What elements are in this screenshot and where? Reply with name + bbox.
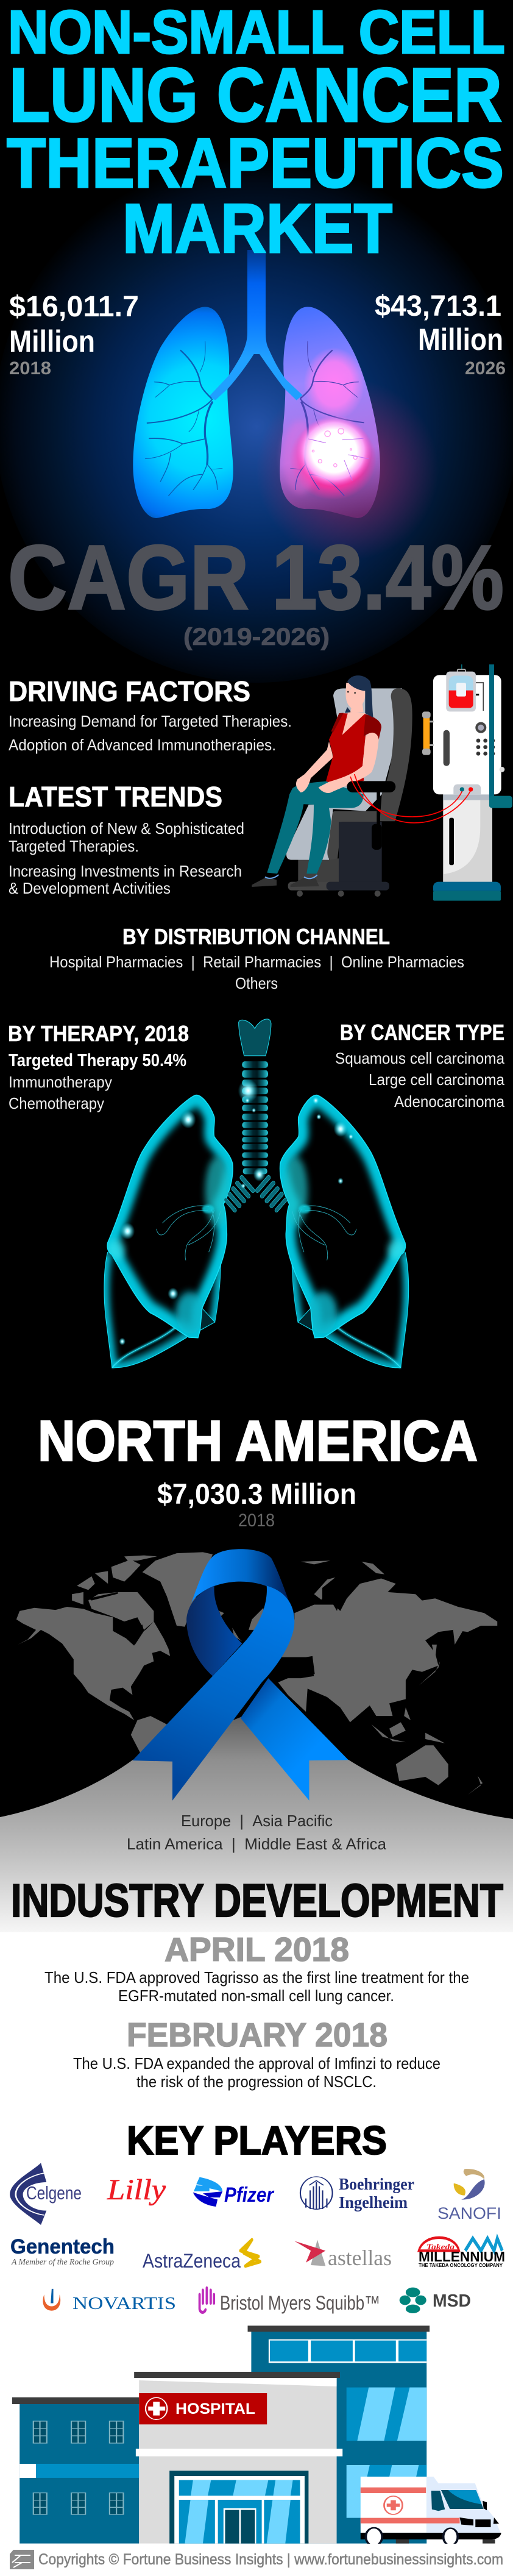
heading: North America: NORTH AMERICA <box>38 1409 478 1473</box>
illustration: patient in chair beside dialysis machine <box>252 664 512 901</box>
logo: Celgene <box>10 2163 82 2225</box>
latest trends list: Introduction of New & Sophisticated <box>9 819 244 838</box>
development: February 2018: The U.S. FDA expanded the approval of Imfinzi to reduce <box>73 2054 440 2073</box>
red hospital sign <box>139 2393 267 2424</box>
title: MARKET <box>122 190 392 268</box>
bronchi rings <box>224 1175 288 1213</box>
hospital sign label: HOSPITAL <box>175 2400 255 2418</box>
logo: Bristol Myers Squibb <box>200 2288 380 2314</box>
segment: by cancer type: Adenocarcinoma <box>394 1092 504 1111</box>
radial glow behind lungs <box>0 158 513 683</box>
blood lines <box>350 774 471 823</box>
left lung airways <box>145 341 222 496</box>
stat: 2026 market value: $43,713.1 <box>375 290 501 322</box>
logo: Astellas: astellas <box>328 2246 392 2270</box>
left lung <box>133 307 233 518</box>
heading: driving factors: DRIVING FACTORS <box>9 675 250 707</box>
tall rear block <box>248 2325 430 2544</box>
logo: MSD: MSD <box>433 2291 471 2311</box>
logo: Pfizer <box>193 2177 275 2207</box>
entrance <box>169 2471 308 2544</box>
segment: by therapy <box>8 1021 189 1112</box>
logo: Boehringer Ingelheim: Boehringer <box>339 2175 414 2193</box>
logo: Genentech: Genentech <box>10 2235 115 2258</box>
other regions <box>127 1812 387 1853</box>
logo: Sanofi <box>437 2169 501 2222</box>
stat: 2026 market value <box>375 290 506 379</box>
stat: 2026 market value: 2026 <box>465 358 506 379</box>
development: February 2018 <box>73 2016 440 2091</box>
segment: by therapy: Targeted Therapy 50.4% <box>9 1051 186 1070</box>
tracheal rings <box>242 1061 268 1174</box>
development: April 2018: APRIL 2018 <box>165 1930 349 1968</box>
segment: by therapy: Immunotherapy <box>9 1073 112 1091</box>
heading: key players: KEY PLAYERS <box>127 2118 387 2163</box>
right lung <box>280 307 380 518</box>
trachea and main bronchi <box>209 250 303 400</box>
logo: Lilly: Lilly <box>107 2174 166 2206</box>
logo: Novartis: NOVARTIS <box>73 2294 176 2313</box>
right lung airways <box>291 341 364 496</box>
logo: Pfizer: Pfizer <box>224 2183 275 2207</box>
development: April 2018 <box>44 1930 469 2005</box>
title <box>7 0 505 268</box>
logo: Sanofi: SANOFI <box>437 2204 501 2222</box>
segment: by distribution channel: Hospital Pharmacies | Retail Pharmacies | Online Pharmacies <box>49 953 464 971</box>
segment: by distribution channel: BY DISTRIBUTION CHANNEL <box>122 924 390 949</box>
stat: 2018 market value: $16,011.7 <box>9 291 139 323</box>
right x-ray lung <box>280 1095 409 1368</box>
footer logo icon <box>10 2550 34 2569</box>
segment: by cancer type <box>335 1020 505 1111</box>
logo: Takeda Millennium: MILLENNIUM <box>419 2249 505 2265</box>
pink glow beside lung <box>256 378 439 561</box>
logo: Genentech: A Member of the Roche Group <box>11 2258 114 2267</box>
driving factors list: Adoption of Advanced Immunotherapies. <box>9 736 276 754</box>
regional year: 2018 <box>238 1510 275 1531</box>
stat: 2018 market value: 2018 <box>9 358 51 379</box>
driving factors list <box>9 712 292 754</box>
other regions: Europe | Asia Pacific <box>181 1812 333 1830</box>
tumour glow <box>297 416 372 486</box>
illustration: x-ray lungs <box>104 1019 409 1368</box>
segment: by cancer type: Squamous cell carcinoma <box>335 1049 504 1067</box>
left x-ray lung <box>104 1095 233 1368</box>
dialysis machine <box>422 664 512 901</box>
awareness ribbon <box>132 1549 348 1801</box>
development: February 2018: FEBRUARY 2018 <box>127 2016 387 2054</box>
logo: Novartis <box>43 2289 176 2313</box>
illustration: hospital building <box>12 2325 501 2546</box>
dark upper panel <box>0 0 513 1932</box>
logo: Takeda Millennium: THE TAKEDA ONCOLOGY COMPANY <box>419 2263 503 2268</box>
woman seated <box>252 675 395 887</box>
latest trends list <box>9 819 244 897</box>
heading: latest trends: LATEST TRENDS <box>9 781 222 813</box>
central block <box>134 2372 342 2544</box>
segment: by therapy: Chemotherapy <box>9 1094 104 1112</box>
other regions: Latin America | Middle East & Africa <box>127 1835 387 1853</box>
logo: Celgene: Celgene <box>26 2182 82 2204</box>
logo: Takeda Millennium: Takeda <box>426 2242 455 2251</box>
latest trends list: & Development Activities <box>9 879 171 897</box>
logo: Boehringer Ingelheim <box>300 2175 414 2211</box>
larynx <box>239 1019 271 1056</box>
CAGR period: (2019-2026) <box>183 624 330 650</box>
development: April 2018: The U.S. FDA approved Tagrisso as the first line treatment for the <box>44 1968 469 1987</box>
stat: 2026 market value: Million <box>418 322 503 357</box>
regional value: $7,030.3 Million <box>157 1478 356 1510</box>
world map <box>16 1552 497 1795</box>
segment: by distribution channel <box>49 924 464 992</box>
logo: MSD <box>400 2288 471 2313</box>
left wing <box>12 2397 141 2544</box>
segment: by distribution channel: Others <box>235 974 278 992</box>
segment: by therapy: BY THERAPY, 2018 <box>8 1021 189 1046</box>
development: February 2018: the risk of the progression of NSCLC. <box>136 2073 377 2091</box>
ambulance <box>361 2477 501 2546</box>
glowing spots <box>119 1079 353 1345</box>
logo: Boehringer Ingelheim: Ingelheim <box>339 2193 408 2211</box>
segment: by cancer type: Large cell carcinoma <box>369 1070 505 1089</box>
development: April 2018: EGFR-mutated non-small cell lung cancer. <box>118 1987 394 2005</box>
logo: Astellas <box>294 2240 392 2270</box>
logo: AstraZeneca <box>143 2240 260 2272</box>
driving factors list: Increasing Demand for Targeted Therapies. <box>9 712 292 730</box>
logo: Bristol Myers Squibb: Bristol Myers Squibb™ <box>220 2292 380 2314</box>
latest trends list: Increasing Investments in Research <box>9 862 242 880</box>
logo: Takeda Millennium <box>419 2238 505 2268</box>
latest trends list: Targeted Therapies. <box>9 837 139 855</box>
stat: 2018 market value <box>9 291 139 379</box>
logo: AstraZeneca: AstraZeneca <box>143 2250 241 2272</box>
stat: 2018 market value: Million <box>9 324 95 358</box>
treatment chair <box>286 688 412 897</box>
illustration: glowing lungs with tumour <box>133 250 380 518</box>
